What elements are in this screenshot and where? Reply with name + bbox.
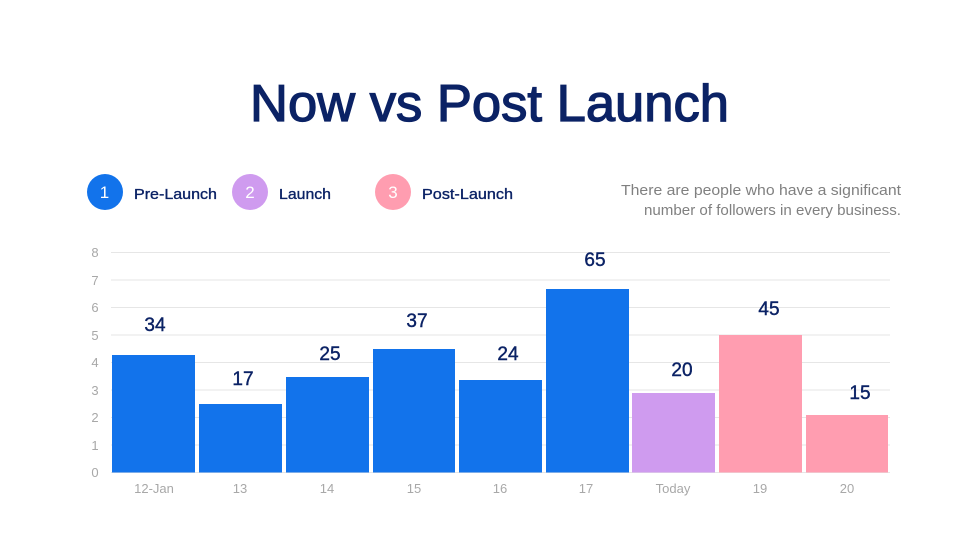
bar value labels: 45 (758, 299, 780, 320)
legend item: Launch (232, 174, 331, 210)
y axis labels: 7 (91, 273, 99, 288)
x axis labels: 12-Jan (134, 481, 174, 496)
x axis labels: 15 (407, 481, 421, 496)
x axis labels: 16 (493, 481, 507, 496)
legend item: Launch: 2 (245, 183, 255, 202)
bar value labels: 37 (406, 311, 428, 332)
legend item: Pre-Launch (87, 174, 217, 210)
x axis labels: Today (656, 481, 691, 496)
bar value labels: 15 (849, 383, 871, 404)
description text: There are people who have a significant (621, 182, 902, 199)
legend item: Post-Launch: Post-Launch (422, 186, 513, 203)
y axis labels: 6 (91, 300, 99, 315)
bar value labels: 25 (319, 344, 341, 365)
bar value labels: 24 (497, 344, 519, 365)
y axis labels: 4 (91, 355, 99, 370)
legend item: Post-Launch (375, 174, 513, 210)
bar chart (91, 245, 890, 496)
y axis labels: 5 (91, 328, 99, 343)
legend item: Post-Launch: 3 (388, 183, 398, 202)
bar value labels: 20 (671, 360, 693, 381)
description text (621, 182, 902, 219)
y axis labels: 0 (91, 465, 99, 480)
x axis labels (134, 481, 854, 496)
x axis labels: 20 (840, 481, 854, 496)
legend (87, 174, 513, 210)
title: Now vs Post Launch (250, 75, 729, 133)
y axis labels: 3 (91, 383, 99, 398)
legend item: Pre-Launch: 1 (100, 183, 109, 202)
x axis labels: 19 (753, 481, 767, 496)
y axis labels: 8 (91, 245, 99, 260)
y axis labels (91, 245, 99, 480)
x axis labels: 14 (320, 481, 334, 496)
y axis labels: 1 (91, 438, 99, 453)
description text: number of followers in every business. (644, 202, 901, 219)
bar value labels: 65 (584, 250, 606, 271)
bar value labels (144, 250, 871, 404)
bar value labels: 17 (232, 369, 254, 390)
legend item: Pre-Launch: Pre-Launch (134, 186, 217, 203)
bars (112, 289, 888, 472)
x axis labels: 17 (579, 481, 593, 496)
y axis labels: 2 (91, 410, 99, 425)
legend item: Launch: Launch (279, 186, 331, 203)
x axis labels: 13 (233, 481, 247, 496)
bar value labels: 34 (144, 315, 166, 336)
